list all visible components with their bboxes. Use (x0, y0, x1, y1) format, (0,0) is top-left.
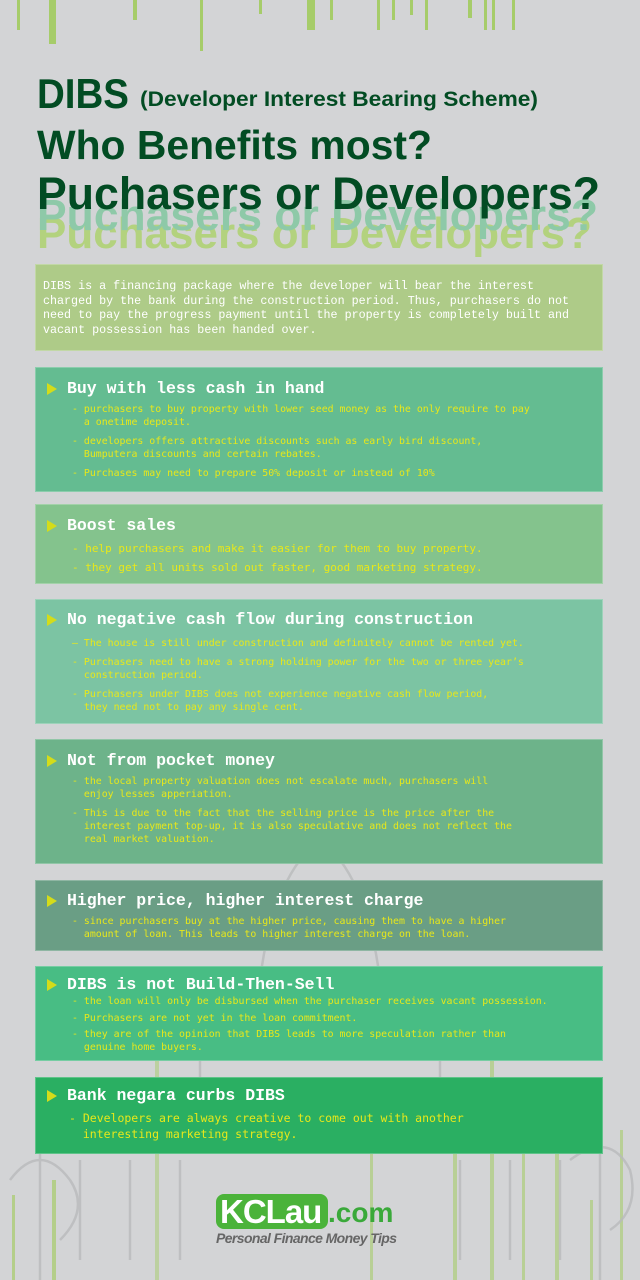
heading: DIBS is not Build-Then-Sell (67, 975, 334, 994)
heading: Higher price, higher interest charge (67, 891, 423, 910)
icon: arrow (47, 520, 57, 532)
bullets: - Purchasers are not yet in the loan commitment. (72, 1012, 357, 1024)
icon: arrow (47, 755, 57, 767)
heading: Bank negara curbs DIBS (67, 1086, 285, 1105)
panel: higher price (35, 880, 603, 951)
bullets: - This is due to the fact that the selling price is the price after the interest payment top-up, it is also speculative and does not reflect the real market valuation. (72, 808, 512, 845)
bullets (72, 996, 548, 1052)
icon: arrow (47, 614, 57, 626)
title: Puchasers or Developers? (37, 168, 600, 219)
bullets: - developers offers attractive discounts such as early bird discount, Bumputera discounts and certain rebates. (72, 436, 482, 460)
heading: Boost sales (67, 516, 176, 535)
bullets: - they are of the opinion that DIBS leads to more speculation rather than genuine home buyers. (72, 1029, 506, 1052)
logo (216, 1193, 396, 1246)
panel: not build-then-sell (35, 966, 603, 1061)
icon: arrow (47, 1090, 57, 1102)
panel: no negative cash flow (35, 599, 603, 724)
icon: arrow (47, 979, 57, 991)
bullets: - Purchasers need to have a strong holding power for the two or three year’s construction period. (72, 657, 524, 681)
title: Puchasers or Developers? (37, 209, 592, 258)
panel: buy with less cash (35, 367, 603, 492)
bullets: - help purchasers and make it easier for them to buy property. - they get all units sold out faster, good marketing strategy. (72, 542, 483, 574)
decorative bottom bars (12, 1061, 623, 1280)
intro text panel (35, 264, 603, 351)
panel: bank negara (35, 1077, 603, 1154)
bullets: - Purchases may need to prepare 50% deposit or instead of 10% (72, 468, 435, 479)
icon: arrow (47, 383, 57, 395)
heading: Not from pocket money (67, 751, 275, 770)
bullets: - Purchasers under DIBS does not experience negative cash flow period, they need not to pay any single cent. (72, 689, 488, 713)
background building sketch (9, 864, 634, 1280)
bullets: - the loan will only be disbursed when the purchaser receives vacant possession. (72, 996, 548, 1007)
bullets: — The house is still under construction and definitely cannot be rented yet. (72, 638, 524, 649)
tagline: Personal Finance Money Tips (216, 1230, 396, 1246)
intro text panel: DIBS is a financing package where the developer will bear the interest charged by the bank during the construction period. Thus, purchasers do not need to pay the progress payment until the property is completely built and vacant possession has been handed over. (43, 279, 569, 337)
panel: not from pocket money (35, 739, 603, 864)
bullets: - the local property valuation does not escalate much, purchasers will enjoy lesses apperiation. (72, 776, 488, 800)
bullets (72, 404, 530, 479)
title: DIBS (37, 70, 129, 117)
title: Puchasers or Developers? (37, 191, 598, 240)
decorative top bars (17, 0, 515, 51)
bullets: - purchasers to buy property with lower seed money as the only require to pay a onetime deposit. (72, 404, 530, 428)
bullets (72, 776, 512, 845)
heading: No negative cash flow during construction (67, 610, 473, 629)
title (37, 70, 600, 258)
heading: Buy with less cash in hand (67, 379, 324, 398)
bullets: - Developers are always creative to come out with another interesting marketing strategy. (69, 1111, 464, 1141)
title: Who Benefits most? (37, 122, 432, 168)
bullets (72, 638, 524, 713)
title: (Developer Interest Bearing Scheme) (140, 88, 538, 111)
panel: boost sales (35, 504, 603, 584)
logo badge: KCLau (220, 1193, 321, 1230)
logo .com: .com (328, 1197, 393, 1228)
bullets: - since purchasers buy at the higher price, causing them to have a higher amount of loan. This leads to higher interest charge on the loan. (72, 916, 506, 940)
icon: arrow (47, 895, 57, 907)
